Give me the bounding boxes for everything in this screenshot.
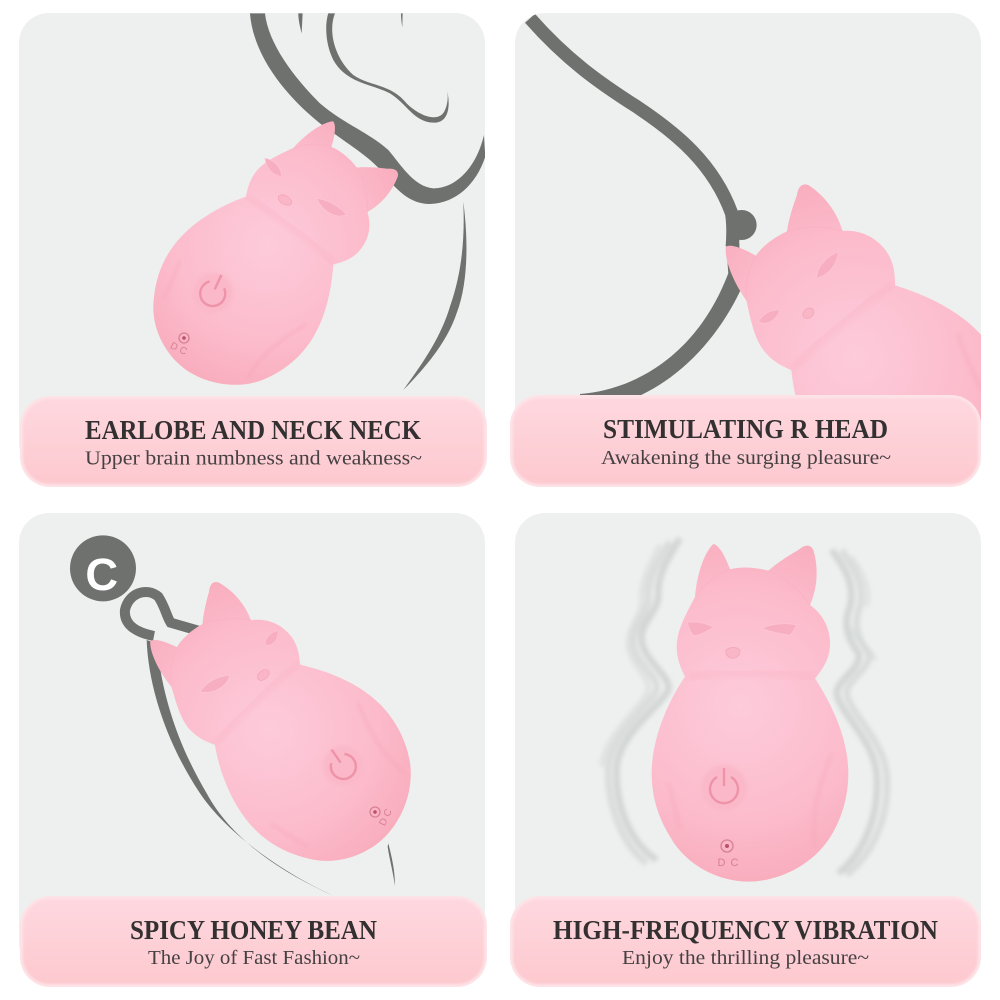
product: cat body tilted left bbox=[110, 557, 449, 898]
cat face bbox=[687, 622, 797, 658]
icon: DC port bbox=[168, 330, 194, 358]
subheading: Upper brain numbness and weakness~ bbox=[85, 448, 422, 470]
cat face bbox=[265, 158, 347, 216]
banner bbox=[510, 395, 981, 487]
icon: DC port: D C bbox=[718, 857, 739, 869]
icon: DC port bbox=[367, 802, 395, 828]
product: cat body upright bbox=[652, 544, 848, 882]
icon: power button bbox=[186, 266, 240, 320]
banner bbox=[20, 396, 487, 487]
heading: SPICY HONEY BEAN bbox=[130, 915, 377, 945]
panel: earlobe and neck bbox=[19, 13, 487, 487]
panel: high-frequency vibration bbox=[510, 513, 981, 987]
icon: DC port: D C bbox=[168, 341, 189, 358]
heading: STIMULATING R HEAD bbox=[603, 414, 888, 444]
icon: letter C badge bbox=[70, 535, 136, 601]
subheading: Awakening the surging pleasure~ bbox=[601, 447, 891, 469]
line art: body outline bbox=[125, 592, 395, 896]
banner bbox=[510, 896, 981, 987]
icon: DC port: D C bbox=[378, 807, 395, 828]
product: cat body pressed to line bbox=[726, 184, 981, 424]
panel: spicy honey bean bbox=[19, 513, 487, 987]
line art: chest outline bbox=[530, 18, 757, 396]
line art: ear and neck outline bbox=[250, 13, 485, 390]
subheading: Enjoy the thrilling pleasure~ bbox=[622, 947, 869, 969]
banner bbox=[20, 896, 487, 987]
icon: DC port bbox=[718, 840, 739, 869]
panel: stimulating head bbox=[510, 13, 981, 487]
subheading: The Joy of Fast Fashion~ bbox=[148, 947, 360, 969]
cat face bbox=[758, 252, 838, 323]
vibration waves right bbox=[832, 550, 887, 875]
icon: letter C badge: C bbox=[85, 549, 118, 600]
vibration waves left bbox=[602, 538, 680, 863]
cat face bbox=[200, 631, 278, 692]
icon: power button bbox=[315, 738, 371, 794]
heading: HIGH-FREQUENCY VIBRATION bbox=[553, 915, 938, 945]
heading: EARLOBE AND NECK NECK bbox=[85, 415, 421, 445]
product: cat body tilted right bbox=[118, 90, 425, 419]
icon: power button bbox=[701, 765, 747, 811]
